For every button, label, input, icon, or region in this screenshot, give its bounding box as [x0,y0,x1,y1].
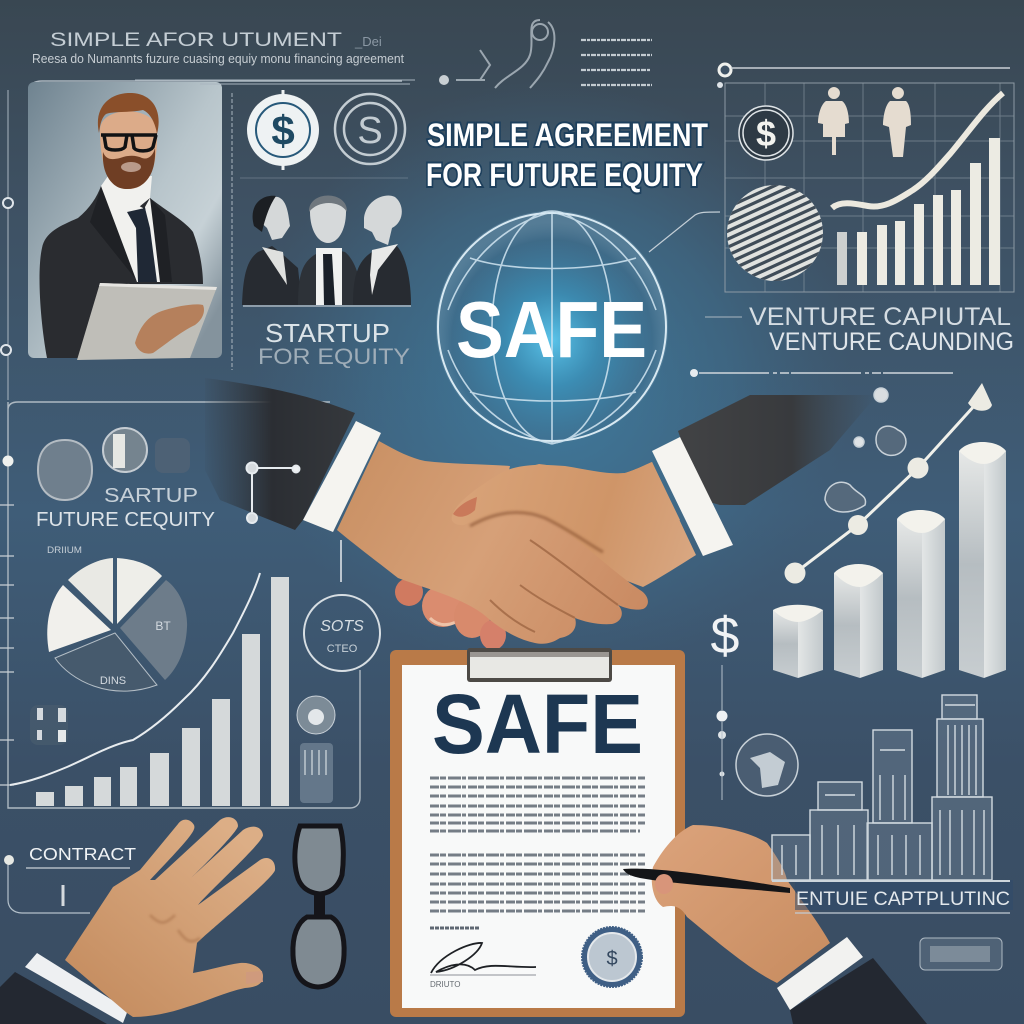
icon: S coin [335,94,405,164]
large 3D bar chart right [711,383,1006,800]
grid frame [725,83,1014,292]
pie chart: BT [155,619,171,633]
badge: stats circle: SOTS [320,618,364,635]
neck and head [100,111,157,189]
hair [98,93,159,134]
badge: stats circle: CTEO [327,643,358,655]
panel: startup future equity left: SARTUP [104,485,198,507]
connector nodes [246,462,341,582]
panel: portrait of businessman [28,82,222,360]
icon: dollar badge: $ [756,113,776,154]
frame and ticks [8,402,360,808]
icon: dollar coin: $ [271,107,295,154]
mouth [121,162,141,172]
bottom right label: ENTUIE CAPTPLUTINC [796,889,1010,910]
small glass icons [30,696,335,803]
tie [127,208,157,282]
clipboard with SAFE document: $ [606,948,618,970]
three founders [242,196,411,305]
sleeve [790,958,927,1024]
contract label: CONTRACT [29,844,136,864]
bar 4 [959,451,984,678]
sphere highlight [113,434,125,468]
paper [402,665,675,1008]
cuff [777,937,863,1010]
hand [135,304,204,354]
top node [719,64,731,76]
badge: stats circle [304,595,380,671]
icon: person male [883,87,911,157]
city skyline [772,695,992,880]
icon: dollar badge [739,106,793,160]
pie chart: DRIIUM [47,545,82,555]
founder centre [298,248,362,305]
hatched disc [727,185,823,281]
knuckle shadows [150,915,200,941]
board [390,650,685,1017]
contract label [4,844,136,913]
hand [652,825,830,983]
right hand thumb and knuckles [452,462,680,548]
right shirt cuff [652,437,733,556]
title: FOR FUTURE EQUITY [426,157,703,193]
curled fingers [395,578,506,650]
panel: venture chart upper right [715,64,1014,317]
pen [623,869,790,893]
businessman suit [40,186,203,358]
icon: split sphere [103,428,147,472]
glasses [101,135,157,151]
icon: S coin: S [357,110,383,152]
growth arrow [795,405,975,573]
header: faded top-left heading: Reesa do Numannts fuzure cuasing equiy monu financing agreement [32,52,404,66]
icon: person female [818,87,849,155]
panel: startup future equity left [0,198,360,808]
tablet [77,283,217,360]
palm and fingers [65,817,275,1017]
thumb nail [453,497,477,517]
clipboard with SAFE document [390,648,685,1017]
header: faded top-left heading [30,30,404,92]
lower left bar chart [10,573,289,806]
suit sleeve [0,972,107,1024]
bars [837,138,1000,285]
dollar sign: $ [711,607,740,665]
fingertip [655,874,673,894]
thumb nail [246,971,263,984]
small sketch icons right [825,388,906,512]
founder right [353,245,411,305]
clip [467,648,612,682]
panel: startup future equity left: FUTURE CEQUITY [36,509,215,531]
title: SIMPLE AGREEMENT [427,117,708,153]
shirt [101,186,160,282]
heading on document: SAFE [432,677,643,771]
growth curve [832,93,1003,208]
right handshake sleeve [678,395,877,505]
globe with SAFE: SAFE [456,285,647,374]
signature [431,943,536,973]
left handshake sleeve [205,378,355,530]
decorative top sketch and text fragment [439,20,723,88]
clipboard with SAFE document: DRIUTO [430,980,461,989]
beard [103,148,155,189]
icon: apple sketch [38,440,92,500]
bar 2 [834,573,860,678]
venture capital label: VENTURE CAUNDING [769,328,1014,356]
startup label: STARTUP [265,318,390,348]
finger creases [490,540,618,632]
divider lines upper left [8,80,415,400]
bar 3 [897,519,922,678]
title [426,117,708,193]
globe with SAFE [436,211,720,444]
cuff [25,953,128,1023]
right hand palm [452,462,696,587]
bottom right label [772,880,1013,970]
contract text lines [430,778,645,911]
lapels [90,188,172,282]
header: faded top-left heading: _Dei [354,34,382,49]
pie chart [47,545,187,691]
startup label [258,318,410,369]
startup label: FOR EQUITY [258,344,410,369]
founder left [242,246,302,305]
left hand back [337,441,648,644]
glasses on table [293,826,344,987]
left shirt cuff [303,421,381,532]
pie chart: DINS [100,675,126,687]
left resting hand [0,817,275,1024]
icon: dollar coin [247,90,319,170]
seal [582,927,642,987]
hand shadow [470,512,603,552]
icon: small box [155,438,190,473]
globe emblem lower right [736,734,798,796]
header: faded top-left heading: SIMPLE AFOR UTUMENT [50,30,343,51]
right writing hand with pen [623,825,927,1024]
venture capital label [699,303,1014,373]
venture capital label: VENTURE CAPIUTAL [749,303,1011,331]
bar 1 [773,610,798,678]
